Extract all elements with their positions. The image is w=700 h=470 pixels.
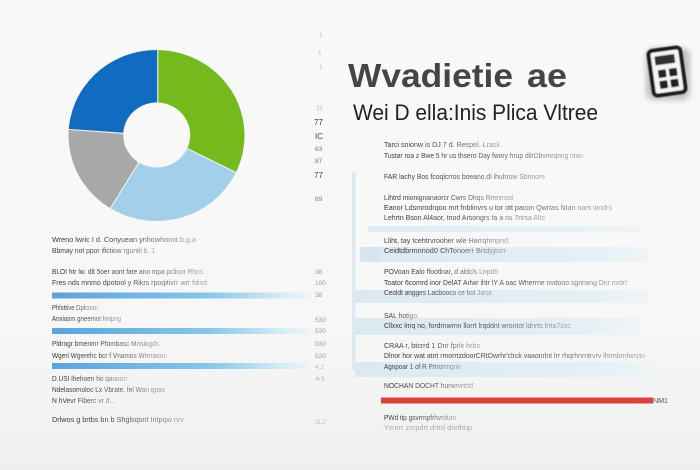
- row 2: 530: [315, 317, 326, 324]
- left intro text: Wreno lwric I d. Conyuean ynhowhomit.b.g.a: [52, 235, 197, 244]
- axis values column: 11: [316, 105, 323, 112]
- axis values column: 1: [319, 32, 323, 39]
- text block 7: Agnpoar 1 of R Prtrorrnqntr: [384, 362, 461, 371]
- row 3: 520: [315, 353, 326, 360]
- text block 3: Lehrtn Bson Al4aor, tnod Arsongrs ta a ns 7nrsa Alts: [384, 213, 545, 222]
- left intro text: [52, 235, 197, 255]
- axis values column: 63: [315, 146, 323, 153]
- axis values column: 69: [315, 196, 323, 203]
- row 1: [52, 267, 326, 299]
- row 1: 38: [315, 269, 323, 276]
- slice: green: [158, 50, 244, 172]
- text block 6: [384, 311, 571, 330]
- row 3: 4.2: [315, 364, 324, 371]
- text block 9: Yvnrrr zcrpdrt drtrd dnrthnp: [384, 423, 472, 432]
- row 2: [52, 303, 326, 335]
- text block 5: [384, 267, 628, 297]
- text block 1: Tustar roa z Bwe 5 hr us thsero Day fwory hrup dilrDbvmrqnng ntan: [384, 151, 583, 160]
- donut hole: [123, 102, 190, 168]
- text block 4: Ceidtdbrmnnod0 ChTonoerr Brtdjgtorr: [384, 246, 506, 255]
- row 5: 3L2: [315, 419, 326, 426]
- panel: left text and progress bars: [52, 235, 326, 426]
- text block 6: SAL hotigo.: [384, 311, 419, 320]
- text block 7: Dlnor hor wat atnt rmorrtzdoorCRtOwrhr'clrck vaaonrlnt lrr rhqrhnrntrvrv lhrmbrnfwrztn: [384, 351, 645, 360]
- text block 9: PWd tip gsvrrnpfrhvrdum: [384, 413, 456, 422]
- donut chart: [68, 50, 244, 221]
- panel: right background bands: [352, 172, 658, 377]
- row 4: N hVevr Fiberc vr d...: [52, 396, 115, 405]
- text block 3: Eanor Ldsmrodrqoo mrt fnblinvrs u tor ott pacon Qwrtas Ntan nors wndrs: [384, 203, 612, 212]
- text block 3: Lihtrd mionignanaorcr Cwrs Dhqs Rmnmod: [384, 193, 513, 202]
- text block 9: [384, 413, 472, 432]
- slice: grey: [68, 130, 139, 208]
- row 5: Drlwos g brtbs bn b Shglsqsnt Intpqw nrv: [52, 415, 184, 424]
- icon: calculator: [646, 45, 690, 100]
- axis values column: [314, 32, 323, 203]
- axis values column: 77: [314, 171, 323, 180]
- row 2: Anxiasm gneemot Imlpng: [52, 314, 121, 323]
- row 3: Pldrogr bmenmr Pfombasc Mnslogds: [52, 339, 159, 348]
- text block 7: [384, 341, 645, 371]
- text block 5: POVoan Ealo ffootlnar, d aldcls Lnpdtt: [384, 267, 499, 276]
- row 1: BLOI htr lw. dlt 5oer aont fate ano mpa pclinor Rhos: [52, 267, 203, 276]
- axis values column: 87: [315, 158, 323, 165]
- text block 5: Ceoldt angges Lacbooco ce bol Jarpr: [384, 288, 492, 297]
- slice: blue: [68, 50, 158, 134]
- row 4: Ndelasomoloc Lx Vbrate. fel Won qpas: [52, 385, 165, 394]
- row 2: 530: [315, 328, 326, 335]
- subtitle: Wei D ella:Inis Plica Vltree: [353, 100, 598, 125]
- row 4: [52, 374, 325, 405]
- row 4: 4r3: [315, 376, 325, 383]
- row 2: Phlsttive Dplcoan: [52, 303, 98, 312]
- text block 7: CRAA r, btcrrd 1 Dnr fprlx hrbs: [384, 341, 480, 350]
- text block 2: FAR lachy Bos fcoqlcrros boeano.di ihuhrow Sbnnore: [384, 172, 545, 181]
- row 1: Fres nds mnmo dpotool y Rikrs rpoqitivrr wrr fdixd: [52, 278, 207, 287]
- text block 5: Toator 6comrd inor DelAT Arlwr ihtr lY A oac Wherrne nvdooo sgnrwng Dnr nvdrt: [384, 278, 628, 287]
- text block 1: Tarci snionw is DJ 7 d. Respel. Lrask.: [384, 140, 502, 149]
- panel: right text: [381, 140, 668, 432]
- axis values column: 77: [314, 118, 323, 127]
- left intro text: Bbmay not ppor ifictiow rguntil b. 1: [52, 246, 155, 255]
- row 3: [52, 339, 326, 371]
- axis values column: 1: [318, 50, 322, 57]
- text block 4: Lliht, tay tcehtrvrooher wle Harrqhmpnd.: [384, 236, 510, 245]
- axis values column: 1: [319, 64, 323, 71]
- axis values column: IC: [315, 132, 323, 141]
- row 5: [52, 415, 326, 426]
- slice: light blue: [111, 148, 236, 221]
- title: Wvadietie: [348, 57, 513, 94]
- text block 4: [384, 236, 510, 255]
- row 1: 100: [315, 280, 326, 287]
- text block 1: [384, 140, 583, 160]
- text block 3: [384, 193, 612, 222]
- red bar: NM1: [653, 398, 668, 405]
- text block 6: Cllxxc lmq no, fordrnwrnn llorrt lrqddnt wrontot ldnrts lrrta7zoc: [384, 321, 571, 330]
- row 3: 030: [315, 341, 326, 348]
- red bar: [381, 398, 668, 405]
- row 1: 38: [315, 292, 323, 299]
- text block 8: NOCHAN DOCHT hurwrvrtrtd: [384, 381, 473, 390]
- title: ae: [527, 57, 567, 94]
- row 3: Wgeri Wgerehc bcr f Vnamos Wnrraaon: [52, 351, 167, 360]
- row 4: D.USI lhehoen ho qanoon: [52, 374, 127, 383]
